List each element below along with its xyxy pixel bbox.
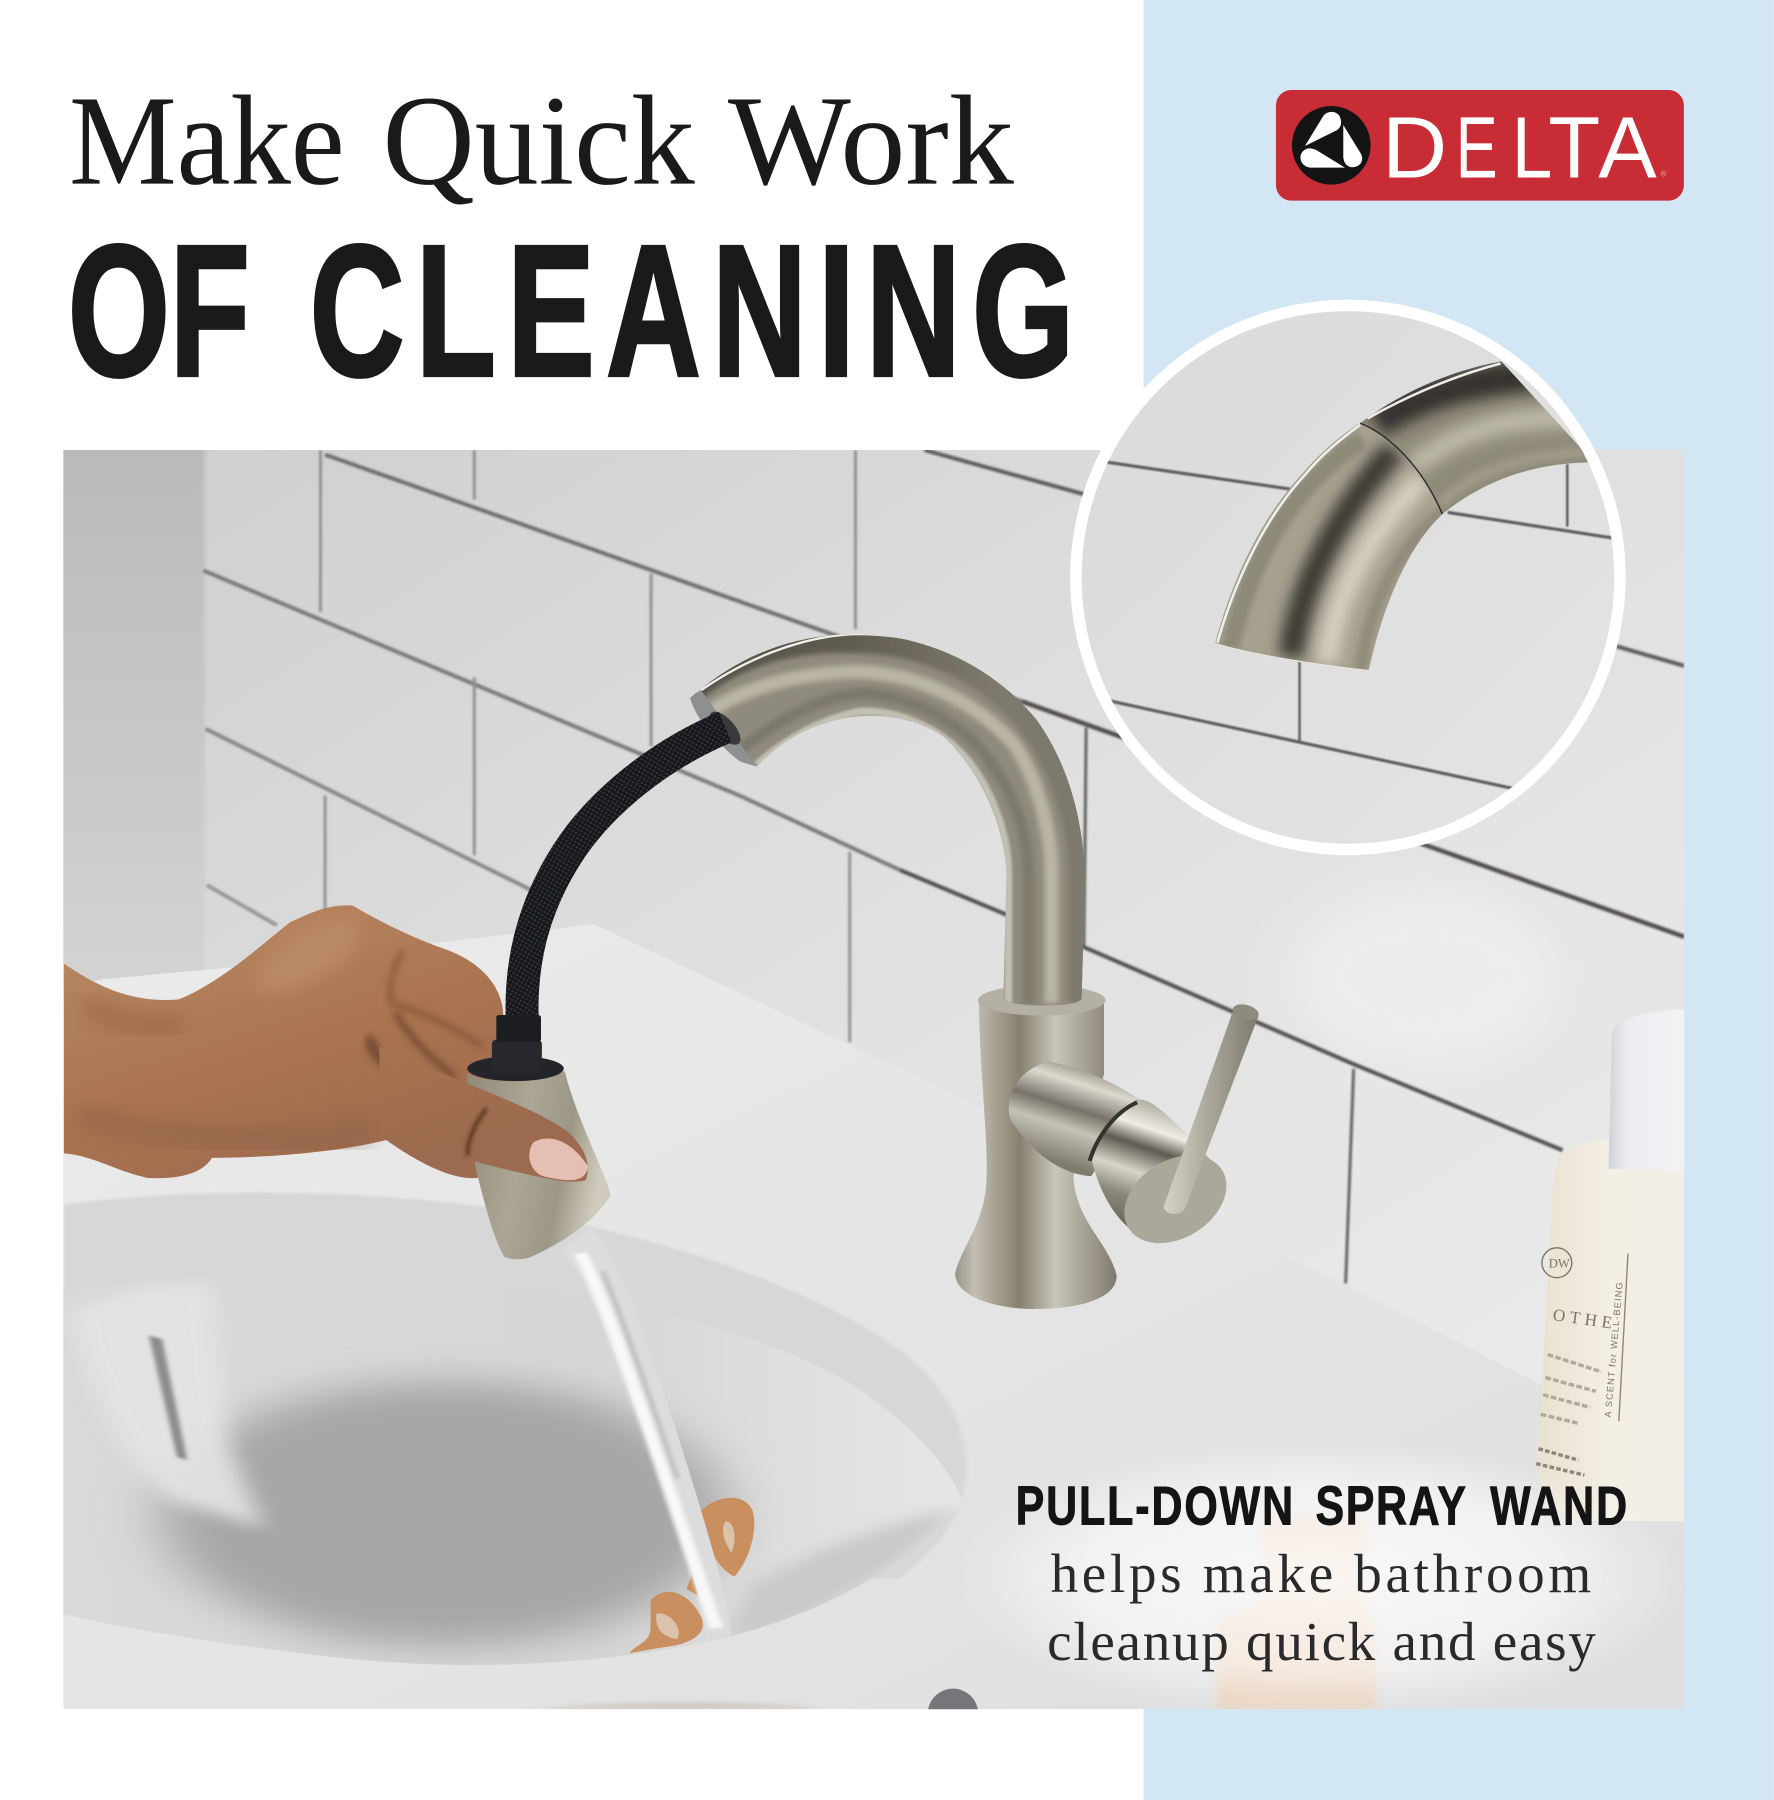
base body (955, 1003, 1117, 1309)
hand (64, 905, 549, 1178)
basin shadows (72, 1283, 959, 1650)
caption haze (953, 1441, 1688, 1716)
caption (1016, 1475, 1627, 1672)
bottle body (1538, 1139, 1684, 1521)
left reflection (72, 1283, 264, 1528)
faucet spout (680, 627, 1100, 1020)
soap bottle (1536, 1010, 1684, 1521)
spray collar (467, 1015, 564, 1081)
Delta logo: L (1512, 99, 1552, 197)
reflection streak (149, 1335, 187, 1460)
tile wall (202, 450, 1684, 1385)
spray head (466, 1071, 611, 1259)
caption: cleanup quick and easy (1047, 1611, 1596, 1672)
caption: SPRAY (1316, 1475, 1466, 1537)
Delta logo: E (1456, 99, 1498, 197)
inset spout right segment (1355, 357, 1598, 521)
caption: WAND (1490, 1475, 1627, 1537)
Delta logo (1276, 90, 1684, 201)
magnified spout inset (1070, 300, 1626, 855)
lever (1164, 1008, 1259, 1214)
basin interior (68, 1362, 962, 1665)
nail (529, 1138, 588, 1180)
hand, hose and spray head (64, 727, 725, 1259)
back of hand highlight (247, 909, 369, 1005)
bright wall reflection (1317, 912, 1506, 1028)
corner wall (52, 442, 205, 1004)
handle disc (1108, 1137, 1243, 1261)
sink (63, 1192, 966, 1665)
spout end face (690, 690, 757, 767)
title: CLEANING (310, 207, 1074, 416)
hose (522, 727, 725, 1019)
bottle label (1536, 1248, 1628, 1475)
caption: helps make bathroom (1051, 1543, 1591, 1604)
bottle label: DW (1549, 1256, 1570, 1270)
caption: PULL-DOWN (1016, 1475, 1293, 1537)
inset grout lines (1101, 461, 1615, 789)
Delta logo: ® (1661, 170, 1667, 179)
bottle cap (1608, 1010, 1684, 1171)
title (68, 69, 1074, 416)
photo panel (52, 442, 1688, 1739)
orange stains (630, 1498, 754, 1653)
thumb (379, 1046, 588, 1182)
title: Make (69, 69, 345, 212)
handle cylinder (1009, 1062, 1140, 1176)
inset spout left segment (1208, 418, 1458, 675)
Delta logo: T (1548, 99, 1600, 197)
title: Work (728, 69, 1015, 212)
grout lines (203, 450, 1684, 1283)
Delta logo: A (1598, 98, 1657, 196)
Delta logo: D (1382, 97, 1447, 196)
bottle label: A SCENT for WELL-BEING (1603, 1281, 1625, 1418)
countertop (63, 924, 1684, 1709)
title: Quick (382, 69, 695, 212)
water stream (561, 1227, 731, 1641)
spout opening (704, 707, 746, 750)
sink rim (63, 1192, 966, 1614)
title: OF (68, 207, 250, 416)
blue background panel (1144, 0, 1774, 1800)
inset seam (1360, 423, 1442, 514)
bottle label: OTHE (1552, 1305, 1618, 1333)
handle groove (1090, 1102, 1137, 1161)
faucet base, handle and lever (955, 985, 1260, 1309)
handle collar (1091, 1100, 1216, 1240)
hand shading (80, 950, 482, 1139)
foreground bottle blurred behind caption (1217, 1515, 1375, 1709)
towel and drain edge (540, 1689, 978, 1739)
